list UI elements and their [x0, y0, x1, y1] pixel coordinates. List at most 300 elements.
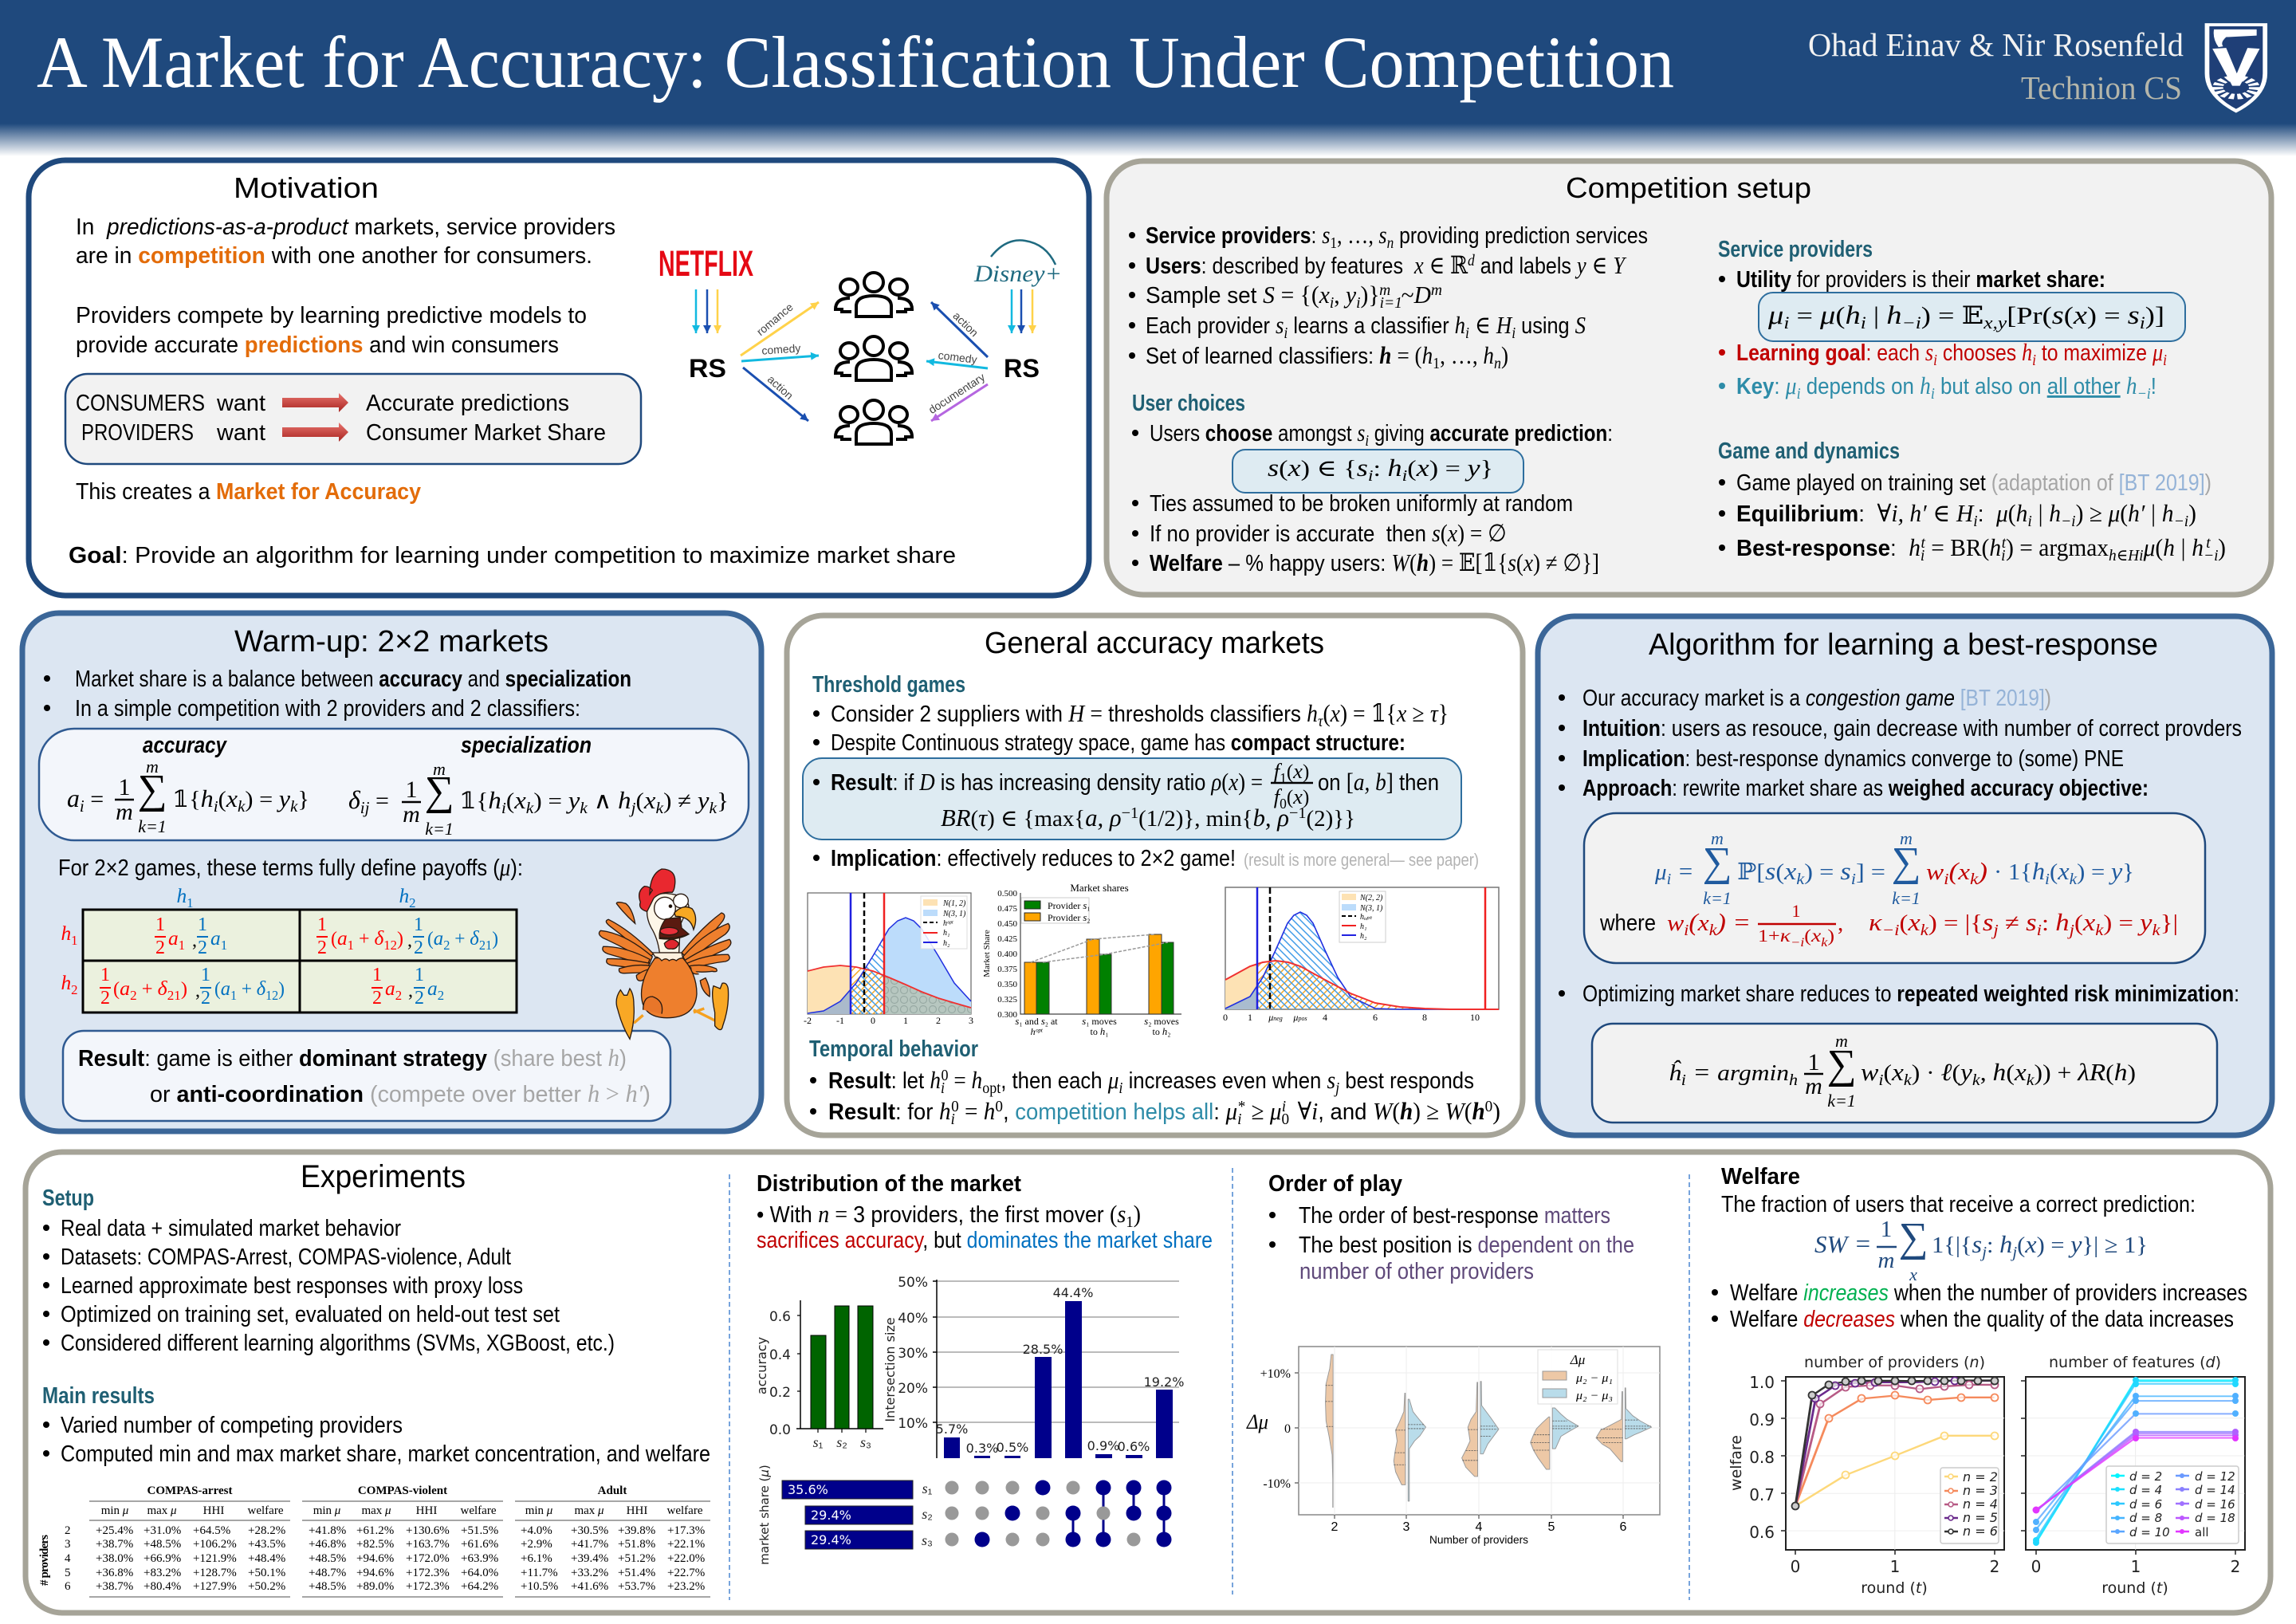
- heading: General accuracy markets: General accuracy markets: [985, 627, 1324, 660]
- legend: all: [2195, 1525, 2209, 1539]
- chart: market shares bars: 0.475: [997, 904, 1017, 914]
- table: payoff matrix: h2: [61, 971, 78, 997]
- table: results by dataset: max μ: [361, 1504, 391, 1517]
- chart: density plot N(1,2) and N(3,1): [804, 893, 973, 1026]
- formula: social welfare: [1814, 1215, 2148, 1284]
- chart: density plot N(1,2) and N(3,1): 1: [903, 1015, 908, 1026]
- chart: market shares bars: Market Share: [982, 930, 992, 977]
- callout: consumers and providers wants: want: [216, 420, 265, 446]
- text block: distribution: • With n = 3 providers, the first mover (s1): [757, 1201, 1141, 1231]
- chart: market shares bars: 0.400: [997, 950, 1017, 959]
- formula box: weighted risk minimization: k=1: [1827, 1091, 1856, 1111]
- cell 2,1: ,: [195, 981, 200, 1001]
- callout: threshold result: f1(x): [1274, 759, 1309, 786]
- legend: Provider s₂: [1048, 912, 1090, 923]
- legend: [1021, 898, 1090, 923]
- legend: n = 5: [1963, 1510, 1998, 1525]
- text block: definitions: [1129, 222, 1648, 372]
- text block: game: [1719, 470, 2226, 564]
- chart: market share bars: s₂: [922, 1506, 933, 1522]
- cell 2,2: [372, 965, 444, 1009]
- text: implication: [813, 846, 1479, 871]
- legend: d = 4: [2129, 1483, 2162, 1497]
- text: payoffs intro: For 2×2 games, these terms fully define payoffs (μ):: [58, 854, 523, 881]
- cell 2,1: 2: [201, 988, 210, 1009]
- formula: social welfare: x: [1909, 1264, 1917, 1284]
- formula: social welfare: 1{|{sj: hj(x) = y}| ≥ 1}: [1932, 1231, 2148, 1261]
- subheading: Threshold games: Threshold games: [812, 672, 965, 698]
- text block: order of play: [1269, 1203, 1634, 1284]
- table: results by dataset: +23.2%: [667, 1580, 705, 1593]
- cell 2,2: ,: [408, 981, 413, 1001]
- formula box: market share as weighted accuracy: ℙ[s(xk) = si] =: [1737, 858, 1885, 888]
- table: results by dataset: +53.7%: [618, 1580, 655, 1593]
- subheading: Main results: Main results: [42, 1383, 155, 1409]
- text block: main results bullets: [43, 1413, 710, 1467]
- table: results by dataset: +28.2%: [248, 1524, 285, 1537]
- cell 2,1: (a1 + δ12): [214, 977, 285, 1003]
- cell 1,1: 1: [198, 914, 207, 935]
- table: results by dataset: +22.0%: [667, 1552, 705, 1565]
- formula box: market share as weighted accuracy: ∑: [1702, 840, 1732, 885]
- chart: accuracy bars: s₁: [813, 1434, 824, 1450]
- table: results by dataset: COMPAS-arrest: [147, 1484, 232, 1497]
- callout: consumers and providers wants: Accurate predictions: [366, 391, 569, 416]
- table: results by dataset: +38.7%: [96, 1580, 133, 1593]
- chart: density plot N(2,2) and N(3,1): 4: [1323, 1012, 1327, 1023]
- text block: temporal results: [810, 1067, 1500, 1128]
- cell 1,1: a1: [210, 926, 227, 953]
- formula box: accuracy and specialization: m: [146, 757, 159, 777]
- text: learning goal: Learning goal: each si chooses hi to maximize μi: [1736, 339, 2167, 369]
- callout: consumers and providers wants: want: [216, 391, 265, 416]
- table: results by dataset: # providers: [38, 1535, 51, 1586]
- table: results by dataset: +22.1%: [667, 1538, 705, 1551]
- formula box: accuracy and specialization: k=1: [425, 819, 454, 839]
- table: results by dataset: +39.8%: [618, 1524, 655, 1537]
- text block: threshold bullets: Despite Continuous strategy space, game has compact structure:: [831, 730, 1406, 756]
- arrows: right RS to users: [926, 302, 988, 421]
- chart: market share bars: 29.4%: [811, 1508, 851, 1523]
- legend: [1538, 1350, 1618, 1404]
- cell 1,2: [316, 914, 498, 958]
- table: results by dataset: 4: [65, 1552, 71, 1565]
- formula: social welfare: ∑: [1898, 1215, 1928, 1260]
- cell 1,2: ,: [407, 930, 412, 951]
- text block: ties and welfare: Ties assumed to be broken uniformly at random: [1150, 491, 1573, 517]
- table: results by dataset: +33.2%: [571, 1567, 608, 1579]
- chart: welfare by number of providers: welfare: [1728, 1435, 1745, 1491]
- chart: market shares bars: 0.425: [997, 934, 1017, 944]
- table: results by dataset: +22.7%: [667, 1567, 705, 1579]
- formula box: market share as weighted accuracy: κ−i(xk) = |{ sj ≠ si: hj(xk) = yk}|: [1869, 909, 2178, 939]
- panel: Algorithm for learning a best-response: [1538, 616, 2272, 1135]
- table: results by dataset: +48.5%: [309, 1580, 346, 1593]
- text block: threshold bullets: [813, 700, 1449, 756]
- arrows: Netflix to RS: [696, 289, 718, 333]
- authors: Ohad Einav & Nir Rosenfeld: [1808, 26, 2184, 63]
- table: results by dataset: +172.3%: [406, 1580, 450, 1593]
- formula box: accuracy and specialization: [39, 729, 749, 840]
- cell 1,2: (a2 + δ21): [427, 926, 498, 953]
- formula box: accuracy and specialization: accuracy: [143, 733, 228, 758]
- callout: threshold result: on [a, b] then: [1318, 769, 1439, 796]
- chart: market share bars: 29.4%: [811, 1532, 851, 1547]
- table: results by dataset: +38.7%: [96, 1538, 133, 1551]
- table: results by dataset: +61.6%: [461, 1538, 498, 1551]
- table: results by dataset: +94.6%: [356, 1567, 394, 1579]
- legend: d = 2: [2129, 1469, 2162, 1484]
- text block: distribution: [757, 1201, 1213, 1253]
- text block: order of play: The best position is dependent on the: [1299, 1233, 1634, 1258]
- table: results by dataset: max μ: [574, 1504, 604, 1517]
- chart: accuracy bars: s₂: [836, 1434, 847, 1450]
- formula box: market share as weighted accuracy: wi(xk): [1926, 858, 1987, 888]
- text block: competition intro: In predictions-as-a-product markets, service providers: [76, 214, 615, 240]
- table: results by dataset: +172.3%: [406, 1567, 450, 1579]
- chart: density plot N(2,2) and N(3,1): 1: [1248, 1012, 1252, 1023]
- table: results by dataset: +41.6%: [571, 1580, 608, 1593]
- table: results by dataset: +64.5%: [193, 1524, 230, 1537]
- chart: violin plot of market share differences: [1246, 1347, 1660, 1546]
- markers: [1792, 1378, 1998, 1510]
- text: goal: Goal: Provide an algorithm for learning under competition to maximize market share: [69, 543, 956, 568]
- legend: d = 10: [2129, 1525, 2170, 1539]
- chart: market shares bars: to h₂: [1153, 1026, 1170, 1037]
- icon: users group top: [835, 273, 912, 317]
- table: results by dataset: +63.9%: [461, 1552, 498, 1565]
- subheading: Temporal behavior: Temporal behavior: [809, 1036, 978, 1062]
- formula box: market share as weighted accuracy: k=1: [1892, 888, 1921, 908]
- formula: social welfare: SW =: [1814, 1230, 1872, 1259]
- text block: threshold bullets: Consider 2 suppliers with H = thresholds classifiers hτ(x) = 𝟙{x ≥ τ}: [831, 700, 1449, 730]
- cell 2,2: 1: [415, 965, 424, 985]
- heading: Motivation: Motivation: [234, 171, 379, 204]
- legend: d = 18: [2195, 1511, 2235, 1525]
- table: results by dataset: +51.8%: [618, 1538, 655, 1551]
- icon: users group middle: [835, 336, 912, 380]
- table: results by dataset: +61.2%: [356, 1524, 394, 1537]
- chart: welfare by number of providers: round (t): [1861, 1579, 1928, 1597]
- table: results by dataset: +127.9%: [193, 1580, 237, 1593]
- chart: violin plot of market share differences: 3: [1403, 1520, 1410, 1534]
- chart: welfare by number of features: round (t): [2101, 1579, 2168, 1597]
- text block: competition intro: are in competition with one another for consumers.: [76, 243, 592, 269]
- chart: density plot N(1,2) and N(3,1): 3: [969, 1015, 973, 1026]
- chart: intersection size bars: 0.9%: [1087, 1438, 1119, 1453]
- text block: game: Game played on training set (adaptation of [BT 2019]): [1736, 470, 2211, 496]
- formula box: weighted risk minimization: m: [1805, 1073, 1822, 1099]
- legend: n = 6: [1963, 1524, 1998, 1539]
- table: results by dataset: max μ: [147, 1504, 177, 1517]
- callout: threshold result: f0(x): [1274, 784, 1309, 812]
- formula box: weighted risk minimization: wi(xk) · ℓ(yk, h(xk)) + λR(h): [1861, 1059, 2136, 1089]
- icon: Disney+ logo: Disney+: [973, 261, 1062, 287]
- table: results by dataset: +41.8%: [309, 1524, 346, 1537]
- chart: welfare by number of providers: number of providers (n): [1804, 1354, 1985, 1371]
- chart: accuracy bars: 0.6: [769, 1309, 791, 1325]
- table: results by dataset: +25.4%: [96, 1524, 133, 1537]
- legend: N(3, 1): [1359, 904, 1383, 913]
- chart: market share bars: s₃: [922, 1532, 933, 1548]
- chart: density plot N(2,2) and N(3,1): μneg: [1268, 1012, 1283, 1023]
- table: results by dataset: +172.0%: [406, 1552, 450, 1565]
- table: results by dataset: +64.2%: [461, 1580, 498, 1593]
- cell 1,1: ,: [192, 930, 197, 951]
- table: results by dataset: welfare: [461, 1504, 497, 1517]
- text block: definitions: Service providers: s1, …, sn providing prediction services: [1146, 222, 1648, 252]
- text block: market share balance: Market share is a balance between accuracy and specialization: [75, 667, 631, 692]
- table: results by dataset: welfare: [248, 1504, 284, 1517]
- legend: [2106, 1466, 2239, 1543]
- legend: d = 14: [2195, 1483, 2235, 1497]
- markers: [2033, 1377, 2239, 1546]
- arrows: left RS to users: [741, 302, 819, 421]
- callout: threshold result: BR(τ) ∈ {max{a, ρ−1(1/2)}, min{b, ρ−1(2)}}: [941, 804, 1355, 832]
- text block: setup bullets: [43, 1216, 615, 1356]
- text block: ties and welfare: [1132, 491, 1599, 576]
- formula box: weighted risk minimization: 1: [1808, 1049, 1819, 1075]
- table: results by dataset: HHI: [416, 1504, 437, 1517]
- formula box: market share as weighted accuracy: 1: [1792, 901, 1800, 921]
- icon: scared chicken: [599, 869, 731, 1039]
- chart: market shares bars: 0.325: [997, 995, 1017, 1005]
- callout: consumers and providers wants: PROVIDERS: [81, 420, 194, 446]
- chart: welfare by number of features: number of features (d): [2049, 1354, 2221, 1371]
- cell 2,1: 1: [201, 965, 210, 985]
- table: results by dataset: +6.1%: [521, 1552, 552, 1565]
- label: left RS: RS: [689, 354, 726, 383]
- text: market for accuracy: This creates a Market for Accuracy: [76, 479, 421, 505]
- section: Distribution of the market: [754, 1171, 1213, 1565]
- arrow labels: left genres: romance: [754, 301, 796, 338]
- arrow labels: left genres: action: [765, 372, 796, 402]
- text block: competition intro: provide accurate predictions and win consumers: [76, 332, 559, 358]
- chart: density plot N(1,2) and N(3,1): -1: [836, 1015, 844, 1026]
- formula box: accuracy and specialization: 𝟙{hi(xk) = yk}: [172, 785, 309, 816]
- text block: main results bullets: Computed min and max market share, market concentration, and welfare: [61, 1441, 710, 1467]
- text: users choose: Users choose amongst si giving accurate prediction:: [1150, 419, 1613, 450]
- callout: consumers and providers wants: Consumer Market Share: [366, 420, 606, 446]
- text block: market share balance: [44, 667, 631, 722]
- text block: welfare bullets: Welfare decreases when the quality of the data increases: [1730, 1307, 2234, 1332]
- chart: market shares bars: 0.450: [997, 919, 1017, 929]
- legend: d = 16: [2195, 1497, 2235, 1512]
- chart: market share bars: s₁: [922, 1480, 933, 1496]
- panel: Warm-up 2x2 markets: [22, 613, 761, 1131]
- arrows: Disney+ to RS: [1012, 289, 1032, 333]
- chart: intersection size bars: 0.6%: [1118, 1439, 1150, 1454]
- subheading: Game and dynamics: Game and dynamics: [1718, 438, 1900, 464]
- cell 1,1: 1: [155, 914, 165, 935]
- chart: intersection size bars: 5.7%: [936, 1421, 968, 1437]
- section: Order of play: [1246, 1171, 1660, 1546]
- table: results by dataset: +50.2%: [248, 1580, 285, 1593]
- formula box: accuracy and specialization: ai =: [67, 784, 104, 816]
- chart: accuracy bars: 0.0: [769, 1422, 791, 1438]
- callout: consumers and providers wants: CONSUMERS: [76, 391, 205, 416]
- cell 2,1: 1: [100, 965, 110, 985]
- text block: definitions: Users: described by features x ∈ ℝd and labels y ∈ Y: [1146, 252, 1627, 279]
- chart: market shares bars: [982, 882, 1181, 1037]
- table: results by dataset: +51.4%: [618, 1567, 655, 1579]
- chart: violin plot of market share differences: 4: [1476, 1520, 1483, 1534]
- table: results by dataset: 3: [65, 1538, 70, 1551]
- callout: consumers and providers wants: [65, 374, 641, 464]
- text block: algorithm bullets: Our accuracy market is a congestion game [BT 2019]): [1582, 686, 2051, 711]
- cell 1,1: 2: [155, 938, 165, 958]
- text block: market share balance: In a simple competition with 2 providers and 2 classifiers:: [75, 696, 580, 722]
- formula box: accuracy and specialization: ∑: [137, 767, 167, 812]
- chart: market share bars: 35.6%: [788, 1482, 828, 1497]
- text block: algorithm bullets: Approach: rewrite market share as weighed accuracy objective:: [1582, 776, 2149, 801]
- text: implication: (result is more general— see paper): [1244, 850, 1479, 870]
- chart: welfare by number of features: 1: [2131, 1557, 2141, 1576]
- table: results by dataset: min μ: [313, 1504, 340, 1517]
- chart: accuracy bars: [754, 1300, 883, 1450]
- subheading: Service providers: Service providers: [1718, 237, 1873, 262]
- text: welfare definition: The fraction of users that receive a correct prediction:: [1721, 1192, 2196, 1217]
- chart: intersection size bars: 28.5%: [1023, 1342, 1063, 1357]
- text block: competition intro: Providers compete by learning predictive models to: [76, 303, 587, 328]
- chart: intersection size bars: 20%: [898, 1381, 928, 1397]
- table: results by dataset: +30.5%: [571, 1524, 608, 1537]
- formula box: market share as weighted accuracy: [1584, 813, 2205, 963]
- panel: Motivation: [29, 160, 1089, 596]
- legend: h₁: [1360, 922, 1366, 931]
- callout: result: [63, 1031, 670, 1121]
- table: payoff matrix: h1: [176, 884, 194, 910]
- table: results by dataset: +43.5%: [248, 1538, 285, 1551]
- chart: accuracy bars: s₃: [860, 1434, 871, 1450]
- formula box: market share as weighted accuracy: m: [1900, 828, 1913, 848]
- table: results by dataset: +48.4%: [248, 1552, 285, 1565]
- table: results by dataset: +82.5%: [356, 1538, 394, 1551]
- chart: market shares bars: 0.375: [997, 965, 1017, 974]
- chart: welfare by number of providers: 1: [1890, 1557, 1900, 1576]
- text block: algorithm bullets: Implication: best-response dynamics converge to (some) PNE: [1582, 746, 2124, 772]
- icon: Technion logo: [2205, 23, 2267, 113]
- table: results by dataset: min μ: [525, 1504, 552, 1517]
- formula box: accuracy and specialization: m: [116, 799, 133, 825]
- arrow labels: right genres: action: [950, 309, 981, 339]
- text block: setup bullets: Datasets: COMPAS-Arrest, COMPAS-violence, Adult: [61, 1245, 511, 1270]
- subheading: Setup: Setup: [42, 1186, 94, 1211]
- table: results by dataset: +163.7%: [406, 1538, 450, 1551]
- cell 1,1: 2: [198, 938, 207, 958]
- cell 1,1: a1: [168, 926, 185, 953]
- text block: order of play: The order of best-response matters: [1299, 1203, 1610, 1229]
- violins: [1326, 1355, 1652, 1508]
- heading: Experiments: Experiments: [301, 1159, 466, 1194]
- chart: intersection size bars: 19.2%: [1144, 1374, 1184, 1390]
- cell 1,2: 2: [414, 938, 423, 958]
- icon: Netflix logo: NETFLIX: [659, 243, 753, 284]
- chart: intersection size bars: 10%: [898, 1416, 928, 1432]
- table: results by dataset: Adult: [598, 1484, 627, 1497]
- text block: distribution: sacrifices accuracy, but dominates the market share: [757, 1228, 1213, 1253]
- text block: setup bullets: Real data + simulated market behavior: [61, 1216, 401, 1241]
- formula: social welfare: 1: [1881, 1217, 1892, 1242]
- chart: welfare by number of features: 2: [2231, 1557, 2240, 1576]
- legend: μ₂ − μ₁: [1575, 1372, 1613, 1385]
- formula box: market share as weighted accuracy: m: [1711, 828, 1724, 848]
- legend: [921, 896, 967, 949]
- text block: welfare bullets: [1712, 1280, 2247, 1332]
- legend: h₁: [943, 929, 949, 938]
- chart: intersection size bars: 50%: [898, 1275, 928, 1291]
- legend: d = 6: [2129, 1497, 2162, 1512]
- chart: welfare by number of features: [2021, 1354, 2245, 1597]
- legend: Provider s₁: [1048, 900, 1090, 911]
- formula box: market share as weighted accuracy: wi(xk) =: [1667, 909, 1751, 939]
- table: results by dataset: +51.2%: [618, 1552, 655, 1565]
- chart: violin plot of market share differences: Δμ: [1246, 1410, 1268, 1433]
- chart: density plot N(2,2) and N(3,1): 8: [1422, 1012, 1427, 1023]
- table: payoff matrix: h2: [399, 884, 416, 910]
- panel: Competition setup: [1107, 161, 2271, 595]
- formula box: accuracy and specialization: k=1: [138, 816, 167, 836]
- chart: intersection size bars: 44.4%: [1053, 1285, 1093, 1300]
- callout: threshold result: [803, 758, 1461, 840]
- callout: threshold result: Result: if D is has increasing density ratio ρ(x) =: [831, 769, 1263, 796]
- cell 2,2: a2: [385, 977, 402, 1003]
- arrow labels: left genres: [754, 301, 801, 402]
- table: results by dataset: +64.0%: [461, 1567, 498, 1579]
- chart: density plot N(2,2) and N(3,1): 0: [1223, 1012, 1228, 1023]
- text: optimizing market share: Optimizing market share reduces to repeated weighted risk minimization:: [1582, 981, 2239, 1007]
- table: payoff matrix: h1: [61, 922, 78, 948]
- table: results by dataset: COMPAS-violent: [358, 1484, 447, 1497]
- cell 2,2: 2: [415, 988, 424, 1009]
- chart: violin plot of market share differences: +10%: [1260, 1367, 1291, 1381]
- chart: welfare by number of providers: 0.8: [1749, 1448, 1775, 1467]
- text block: ties and welfare: Welfare – % happy users: W(h) = 𝔼[𝟙{s(x) ≠ ∅}]: [1150, 549, 1599, 576]
- chart: welfare by number of providers: 1.0: [1749, 1373, 1775, 1392]
- legend: h₂: [1360, 932, 1367, 941]
- table: results by dataset: +51.5%: [461, 1524, 498, 1537]
- legend: N(2, 2): [1359, 894, 1383, 902]
- chart: intersection size bars: 40%: [898, 1311, 928, 1327]
- text block: definitions: Sample set S = {(xi, yi)}i=1m ~Dm: [1146, 281, 1442, 312]
- chart: market share bars: [757, 1465, 933, 1565]
- text block: setup bullets: Optimized on training set, evaluated on held-out test set: [61, 1302, 560, 1327]
- heading: Competition setup: Competition setup: [1566, 171, 1811, 204]
- text block: main results bullets: Varied number of competing providers: [61, 1413, 403, 1438]
- table: results by dataset: 5: [65, 1567, 70, 1579]
- chart: density plot N(2,2) and N(3,1): 10: [1470, 1012, 1480, 1023]
- chart: violin plot of market share differences: -10%: [1263, 1477, 1291, 1491]
- legend: [1339, 891, 1386, 942]
- icon: Disney+ logo: [973, 240, 1062, 287]
- heading: Welfare: Welfare: [1721, 1164, 1800, 1189]
- table: results by dataset: +17.3%: [667, 1524, 705, 1537]
- legend: μ₂ − μ₃: [1575, 1390, 1613, 1402]
- legend: N(3, 1): [942, 910, 966, 918]
- arrow: consumers want: [282, 393, 348, 412]
- table: results by dataset: +66.9%: [144, 1552, 181, 1565]
- formula box: accuracy and specialization: 1: [118, 774, 131, 800]
- chart: market shares bars: s₁ moves: [1082, 1016, 1117, 1027]
- section: Welfare: [1712, 1164, 2247, 1597]
- cell 2,2: 2: [372, 988, 382, 1009]
- legend: d = 8: [2129, 1511, 2162, 1525]
- heading: Distribution: Distribution of the market: [757, 1171, 1021, 1197]
- legend: Δμ: [1570, 1352, 1585, 1367]
- table: results by dataset: 6: [65, 1580, 71, 1593]
- chart: accuracy bars: 0.4: [769, 1347, 791, 1363]
- chart: market shares bars: 0.300: [997, 1010, 1017, 1020]
